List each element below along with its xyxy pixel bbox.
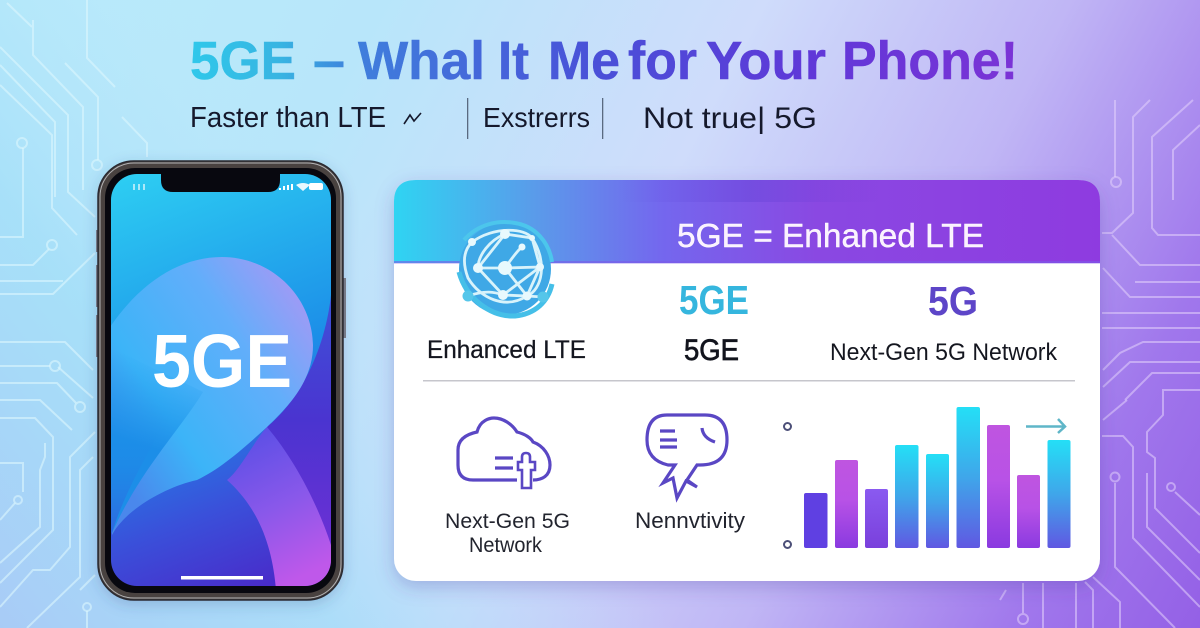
title: Me [548, 31, 620, 91]
card header band [394, 180, 1100, 264]
trend arrow [1026, 419, 1065, 433]
title: Your [706, 31, 826, 91]
phone [96, 161, 346, 600]
wallpaper corner [267, 295, 331, 545]
bars [804, 407, 1070, 548]
panel: comparison card [394, 180, 1100, 581]
comparison: 5GE column: 5GE [684, 334, 739, 367]
wallpaper swoosh [227, 427, 331, 590]
chart axis dots [784, 423, 791, 548]
icon: cloud [458, 418, 550, 488]
phone notch [161, 171, 280, 192]
label: Next-Gen 5G Network: Next-Gen 5G [445, 510, 570, 533]
title: Whal [358, 31, 485, 91]
phone status bar [133, 183, 323, 191]
comparison: 5GE column: 5GE [679, 277, 749, 323]
circuit traces: right side [1000, 100, 1200, 628]
circuit traces: left side [0, 0, 147, 628]
icon: network globe [459, 222, 552, 316]
subtitle row: Faster than LTE [190, 102, 386, 134]
title: – [313, 31, 345, 91]
label: Next-Gen 5G Network: Network [469, 534, 542, 557]
label: Next-Gen 5G Network [445, 510, 570, 557]
comparison: 5G column: Next-Gen 5G Network [830, 339, 1058, 366]
title: for [628, 31, 697, 91]
title: It [498, 31, 529, 91]
bar chart [784, 407, 1070, 548]
comparison: 5G column [830, 278, 1058, 366]
header title: 5GE = Enhaned LTE [677, 217, 984, 254]
phone screen [108, 174, 331, 590]
wallpaper ribbon [108, 257, 313, 535]
subtitle row: Exstrerrs [483, 102, 590, 133]
card body [394, 180, 1100, 581]
phone body [98, 161, 343, 600]
comparison: 5GE column [679, 277, 749, 367]
icon: small signal squiggle [404, 113, 421, 124]
home indicator [181, 576, 263, 580]
label: Nennvtivity: Nennvtivity [635, 508, 745, 533]
comparison: Enhanced LTE label: Enhanced LTE [427, 336, 586, 364]
divider [423, 380, 1075, 382]
title [190, 31, 1018, 91]
subtitle row [190, 98, 817, 139]
title: 5GE [190, 31, 296, 91]
comparison: 5G column: 5G [928, 278, 978, 324]
phone side buttons [96, 230, 346, 357]
title: Phone! [842, 31, 1018, 91]
subtitle row: Not true| 5G [643, 102, 817, 135]
phone 5GE label: 5GE [152, 319, 292, 403]
icon: speech bubble [647, 415, 727, 498]
